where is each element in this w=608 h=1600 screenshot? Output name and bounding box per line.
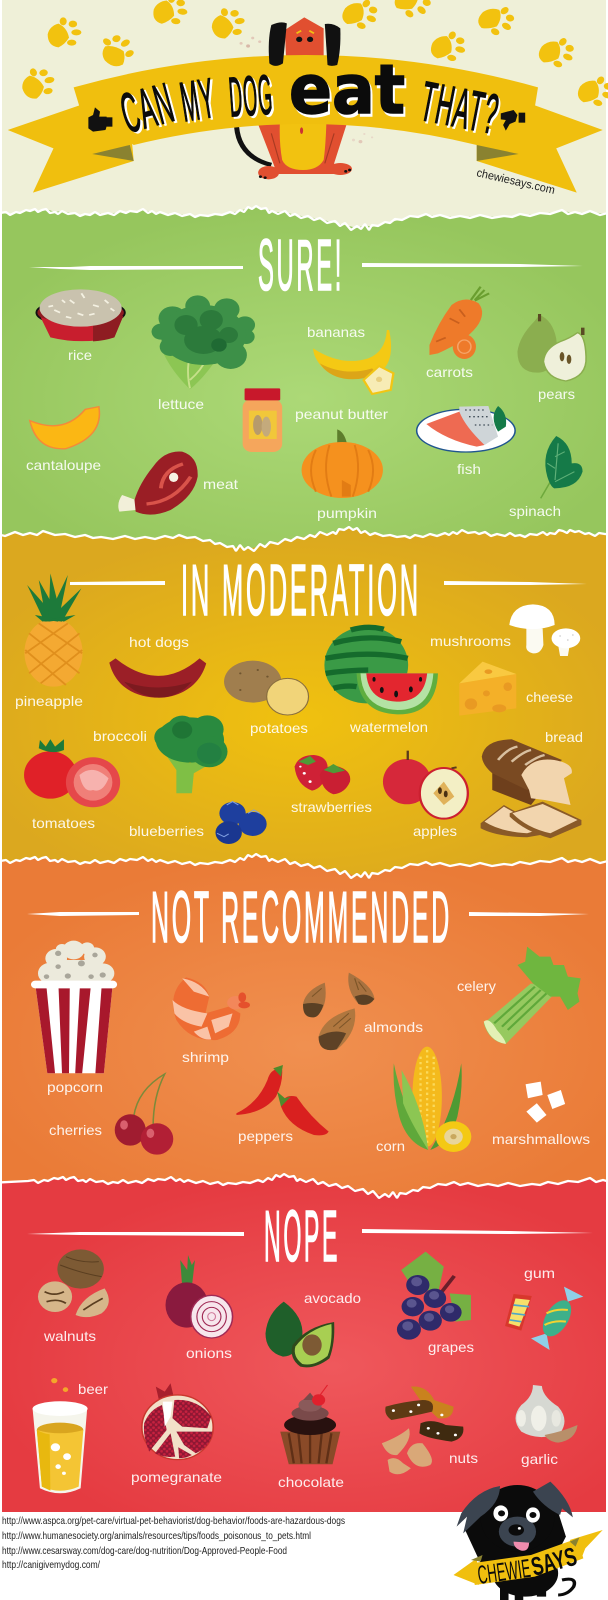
food: carrots: carrots xyxy=(426,364,473,380)
banner text: chewie: CHEWIE xyxy=(476,1553,532,1590)
food: grapes: grapes xyxy=(428,1339,474,1355)
paw prints xyxy=(17,0,608,111)
food: marshmallows xyxy=(492,1082,590,1147)
food: gum xyxy=(505,1265,583,1350)
food: pumpkin xyxy=(302,429,383,521)
food: pumpkin: pumpkin xyxy=(317,505,377,521)
food: potatoes xyxy=(224,661,309,736)
food: cherries: cherries xyxy=(49,1122,102,1138)
icon: thumbs down xyxy=(501,110,525,131)
food: hot dogs: hot dogs xyxy=(129,634,189,650)
icon: salmon plate xyxy=(417,406,515,452)
food: apples: apples xyxy=(413,823,457,839)
food: grapes xyxy=(397,1252,474,1355)
food: rice: rice xyxy=(68,347,92,363)
source links: http://canigivemydog.com/ xyxy=(2,1560,100,1571)
food: broccoli xyxy=(93,715,228,793)
heading: sure xyxy=(29,226,583,306)
panel: in moderation xyxy=(0,527,608,910)
food: strawberries xyxy=(291,755,372,815)
icon: chili peppers xyxy=(236,1065,329,1135)
icon: banana xyxy=(313,330,393,394)
icon: watermelon xyxy=(324,627,438,714)
food: garlic xyxy=(516,1385,578,1467)
food: corn xyxy=(376,1047,471,1154)
food: garlic: garlic xyxy=(521,1451,558,1467)
icon: candy xyxy=(505,1287,583,1350)
food: chocolate xyxy=(278,1385,344,1490)
food: fish xyxy=(417,406,515,477)
icon: marshmallows xyxy=(526,1082,565,1123)
food: meat xyxy=(118,451,238,515)
food: beer: beer xyxy=(78,1381,108,1397)
icon: bread loaf xyxy=(481,739,581,838)
icon: cheese wedge xyxy=(459,662,516,716)
icon: chocolate cupcake xyxy=(280,1385,340,1464)
food: cantaloupe: cantaloupe xyxy=(26,457,101,473)
food: celery xyxy=(457,947,581,1044)
panel: sure xyxy=(2,205,606,549)
title ribbon xyxy=(8,22,603,193)
food: gum: gum xyxy=(524,1265,555,1281)
icon: blueberries xyxy=(216,802,267,844)
source links: http://www.aspca.org/pet-care/virtual-pet-behaviorist/dog-behavior/foods-are-hazardous-dogs xyxy=(2,1516,345,1527)
icon: pomegranate xyxy=(142,1383,213,1460)
food: onions xyxy=(166,1255,233,1361)
food: meat: meat xyxy=(203,476,238,492)
food: cheese xyxy=(459,662,573,716)
icon: pineapple xyxy=(24,573,83,687)
food: lettuce: lettuce xyxy=(158,396,204,412)
icon: avocado xyxy=(266,1302,334,1367)
food: walnuts xyxy=(38,1249,109,1344)
food: beer xyxy=(33,1378,108,1493)
source links: http://www.humanesociety.org/animals/resources/tips/foods_poisonous_to_pets.html xyxy=(2,1531,311,1542)
food: bread: bread xyxy=(545,729,583,745)
food: chocolate: chocolate xyxy=(278,1474,344,1490)
icon: mushrooms xyxy=(509,604,580,656)
food: fish: fish xyxy=(457,461,481,477)
title: can my dog eat that: MY xyxy=(178,67,222,135)
food: pineapple xyxy=(15,573,83,709)
icon: tomatoes xyxy=(24,739,120,807)
food: shrimp: shrimp xyxy=(182,1049,229,1065)
icon: strawberries xyxy=(295,755,350,794)
icon: almonds xyxy=(303,973,374,1050)
food: spinach: spinach xyxy=(509,503,561,519)
icon: garlic xyxy=(516,1385,578,1443)
panel: not recommended xyxy=(2,853,606,1196)
source links: http://www.cesarsway.com/dog-care/dog-nutrition/Dog-Approved-People-Food xyxy=(2,1546,287,1557)
panel: header: THAT? xyxy=(416,69,504,146)
food: almonds xyxy=(303,973,423,1050)
food: blueberries: blueberries xyxy=(129,823,204,839)
food: avocado: avocado xyxy=(304,1290,361,1306)
icon: pumpkin xyxy=(302,429,383,498)
title: can my dog eat that: DOG xyxy=(227,63,275,128)
icon: peanut butter jar xyxy=(243,388,282,452)
food: mushrooms: mushrooms xyxy=(430,633,511,649)
icon: rice bowl xyxy=(36,289,125,341)
food: watermelon xyxy=(324,627,438,735)
icon: cherries xyxy=(115,1074,173,1155)
icon: lettuce xyxy=(152,295,255,389)
title: can my dog eat that: CAN xyxy=(114,70,181,145)
food: spinach xyxy=(509,436,583,519)
icon: potatoes xyxy=(224,661,309,715)
food: bananas: bananas xyxy=(307,324,365,340)
food: cantaloupe xyxy=(26,407,101,473)
food: onions: onions xyxy=(186,1345,232,1361)
icon: grapes xyxy=(397,1252,471,1340)
icon: apples xyxy=(383,751,468,819)
icon: pears xyxy=(517,314,586,381)
icon: corn xyxy=(394,1047,471,1152)
dog mascot body xyxy=(236,17,373,179)
icon: sausage xyxy=(109,658,206,698)
food: peppers xyxy=(236,1065,329,1144)
title: can my dog eat that: eat xyxy=(289,51,405,130)
icon: cantaloupe slice xyxy=(30,407,99,449)
food: bananas xyxy=(307,324,393,394)
heading: nope: NOPE xyxy=(264,1197,340,1277)
food: rice xyxy=(36,289,125,363)
food: cheese: cheese xyxy=(526,689,573,705)
food: popcorn: popcorn xyxy=(47,1079,103,1095)
heading: nope xyxy=(27,1197,593,1277)
icon: carrot xyxy=(429,287,489,359)
banner text: says: SAYS xyxy=(528,1541,580,1582)
food: cherries xyxy=(49,1074,173,1155)
food: almonds: almonds xyxy=(364,1019,423,1035)
food: bread xyxy=(481,729,583,838)
chewie says mascot xyxy=(453,1482,603,1600)
icon: walnuts xyxy=(38,1249,109,1317)
food: strawberries: strawberries xyxy=(291,799,372,815)
title: can my dog eat that: DOG xyxy=(229,64,277,130)
food: carrots xyxy=(426,287,489,380)
title: can my dog eat that xyxy=(114,51,506,148)
food: pears: pears xyxy=(538,386,575,402)
icon: beer glass xyxy=(33,1378,88,1493)
food: watermelon: watermelon xyxy=(349,719,428,735)
food: hot dogs xyxy=(109,634,206,698)
icon: popcorn box xyxy=(31,941,117,1073)
food: peppers: peppers xyxy=(238,1128,293,1144)
icon: celery xyxy=(484,947,581,1044)
icon: shrimp xyxy=(172,977,250,1040)
food: lettuce xyxy=(152,295,255,412)
food: pomegranate: pomegranate xyxy=(131,1469,222,1485)
food: tomatoes: tomatoes xyxy=(32,815,95,831)
food: popcorn xyxy=(31,941,117,1095)
title: can my dog eat that: MY xyxy=(176,66,219,133)
food: peanut butter: peanut butter xyxy=(295,406,388,422)
food: shrimp xyxy=(172,977,250,1065)
icon: thumbs up xyxy=(88,107,112,132)
food: marshmallows: marshmallows xyxy=(492,1131,590,1147)
food: apples xyxy=(383,751,468,839)
food: nuts xyxy=(382,1386,478,1474)
food: tomatoes xyxy=(24,739,120,831)
food: peanut butter xyxy=(243,388,388,452)
panel: nope xyxy=(2,1173,606,1512)
food: pomegranate xyxy=(131,1383,222,1485)
food: pineapple: pineapple xyxy=(15,693,83,709)
food: nuts: nuts xyxy=(449,1450,478,1466)
food: walnuts: walnuts xyxy=(43,1328,96,1344)
heading: sure: SURE! xyxy=(258,226,344,306)
food: mushrooms xyxy=(430,604,580,656)
icon: onions xyxy=(166,1255,233,1338)
food: potatoes: potatoes xyxy=(250,720,308,736)
food: pears xyxy=(517,314,586,402)
icon: broccoli xyxy=(154,715,228,793)
food: corn: corn xyxy=(376,1138,405,1154)
website label: chewiesays.com xyxy=(475,167,556,197)
food: avocado xyxy=(266,1290,361,1367)
food: celery: celery xyxy=(457,978,496,994)
title: can my dog eat that: eat xyxy=(291,54,407,133)
icon: steak xyxy=(118,451,198,515)
title: can my dog eat that: CAN xyxy=(117,72,183,146)
icon: spinach leaf xyxy=(541,436,583,498)
food: blueberries xyxy=(129,802,267,844)
icon: mixed nuts xyxy=(382,1386,463,1474)
panel: header xyxy=(2,0,608,232)
food: broccoli: broccoli xyxy=(93,728,147,744)
source links xyxy=(2,1516,345,1571)
